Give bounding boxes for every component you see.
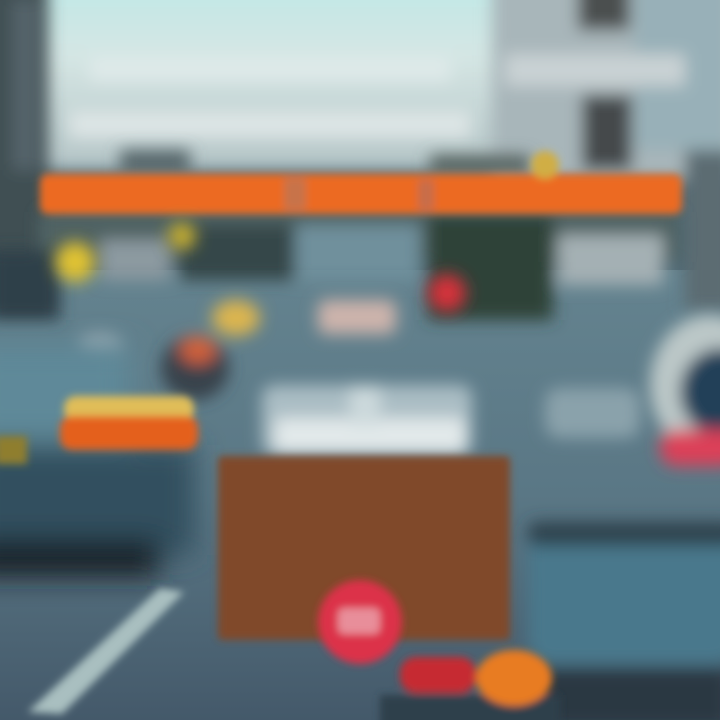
red and orange lights at bottom [380, 650, 560, 720]
left car [0, 345, 198, 576]
road background [0, 270, 720, 720]
red circle badge [318, 580, 402, 664]
traffic lights and small road vehicles [55, 222, 466, 400]
white road marking [28, 588, 184, 714]
right building [492, 0, 720, 310]
right car lower [500, 522, 720, 720]
orange banner [40, 151, 682, 214]
white load on top of box [262, 385, 640, 455]
tree line beneath banner [0, 150, 680, 320]
brown box [218, 456, 510, 640]
sky [0, 0, 520, 170]
left building [0, 0, 48, 310]
right car upper with tail light [650, 315, 720, 466]
